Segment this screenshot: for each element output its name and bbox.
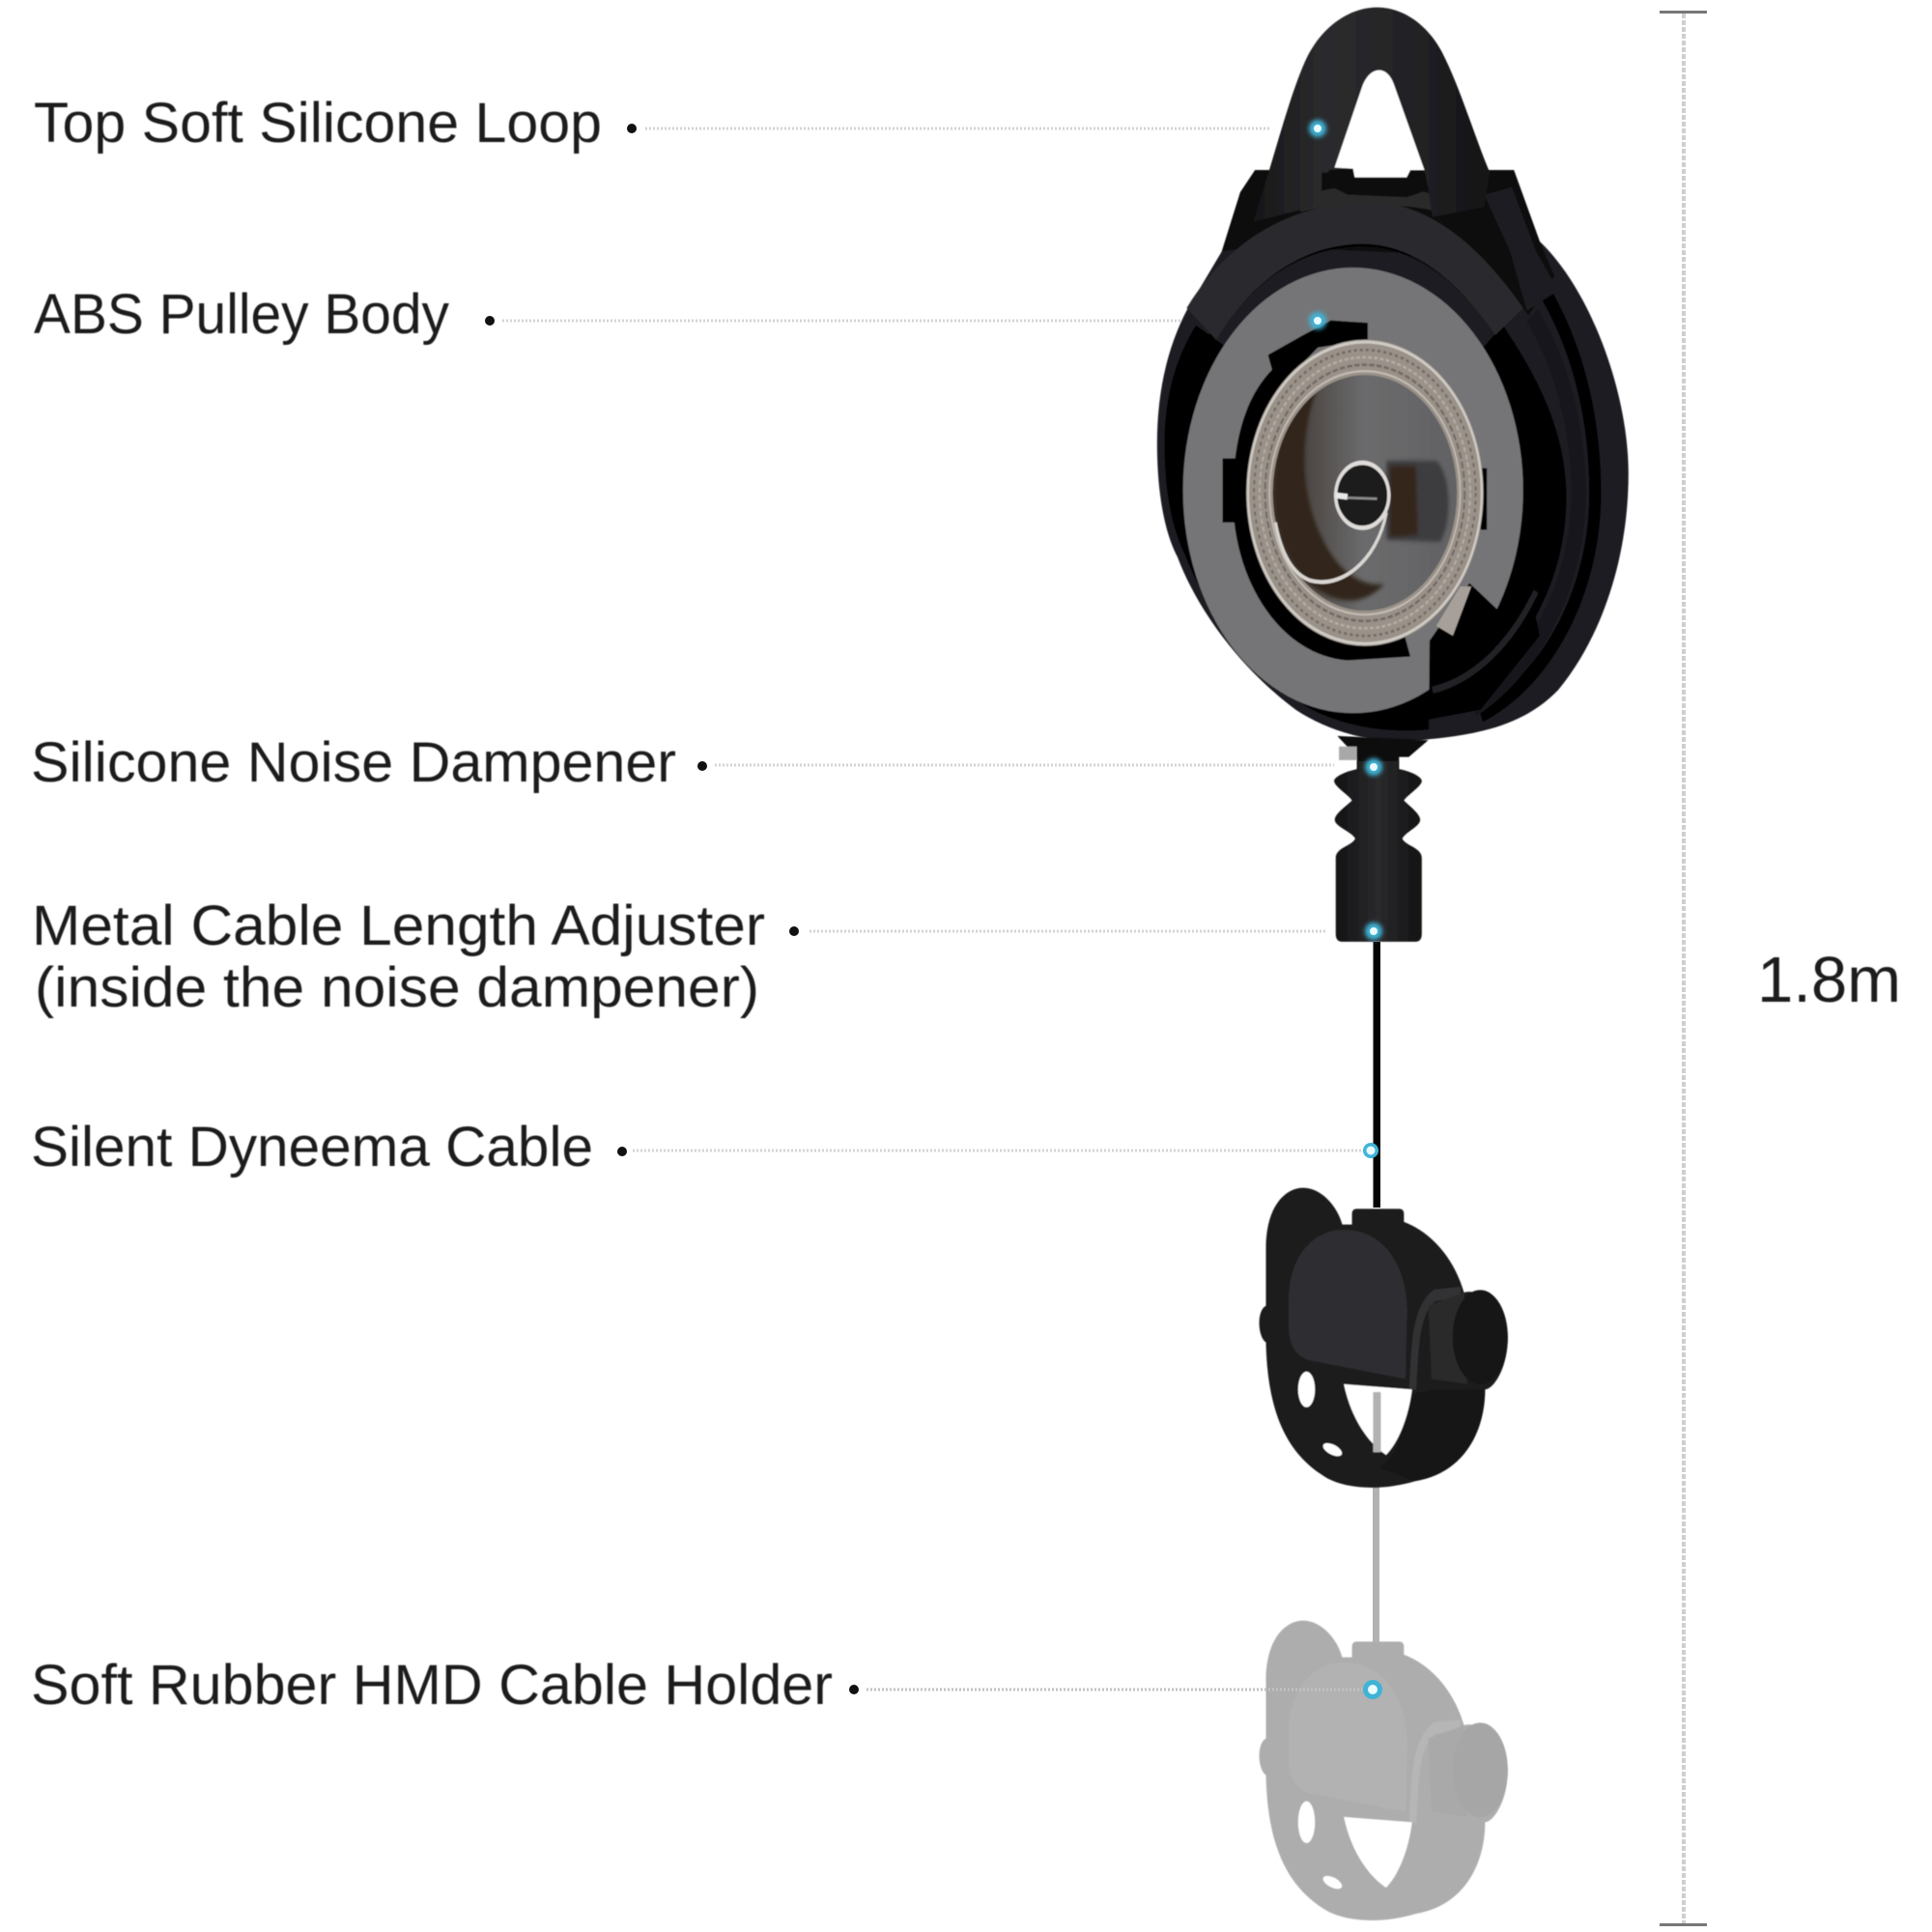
spiral tail and hub — [1275, 513, 1386, 582]
label: Soft Rubber HMD Cable Holder: Soft Rubber HMD Cable Holder — [31, 1654, 833, 1717]
spring coil — [1260, 357, 1470, 629]
label: Silicone Noise Dampener — [31, 731, 1382, 794]
grey disc — [1183, 268, 1523, 713]
dimension label: 1.8m — [1757, 944, 1901, 1016]
soft rubber holder: raised position — [1260, 1188, 1508, 1488]
dark hollow crescent — [1233, 365, 1410, 661]
dimension scale: 1.8m — [1660, 11, 1707, 1926]
spring inner — [1271, 375, 1458, 611]
label: Metal Cable Length Adjuster — [32, 895, 1382, 1019]
label: ABS Pulley Body — [34, 283, 1326, 346]
ghost holder: lowered position — [1260, 1621, 1508, 1920]
upper dark shoulder — [1222, 170, 1554, 316]
label: ABS Pulley Body: ABS Pulley Body — [34, 283, 450, 346]
label: Top Soft Silicone Loop: Top Soft Silicone Loop — [34, 92, 602, 155]
label: Soft Rubber HMD Cable Holder — [31, 1654, 1382, 1717]
loop — [1299, 185, 1440, 212]
body silhouette — [1157, 170, 1629, 742]
noise dampener and adjuster — [1334, 736, 1429, 942]
grey ghost cable — [1373, 1484, 1379, 1643]
label: Metal Cable Length Adjuster: (inside the noise dampener) — [35, 956, 759, 1019]
label: Top Soft Silicone Loop — [34, 92, 1326, 155]
silent dyneema cable — [1374, 942, 1380, 1208]
label: Metal Cable Length Adjuster: Metal Cable Length Adjuster — [32, 895, 765, 957]
label: Silent Dyneema Cable — [31, 1116, 1378, 1179]
label: Silent Dyneema Cable: Silent Dyneema Cable — [31, 1116, 593, 1179]
pulley: body and top silicone loop — [1157, 8, 1629, 742]
band — [1208, 232, 1506, 340]
label: Silicone Noise Dampener: Silicone Noise Dampener — [31, 731, 676, 794]
